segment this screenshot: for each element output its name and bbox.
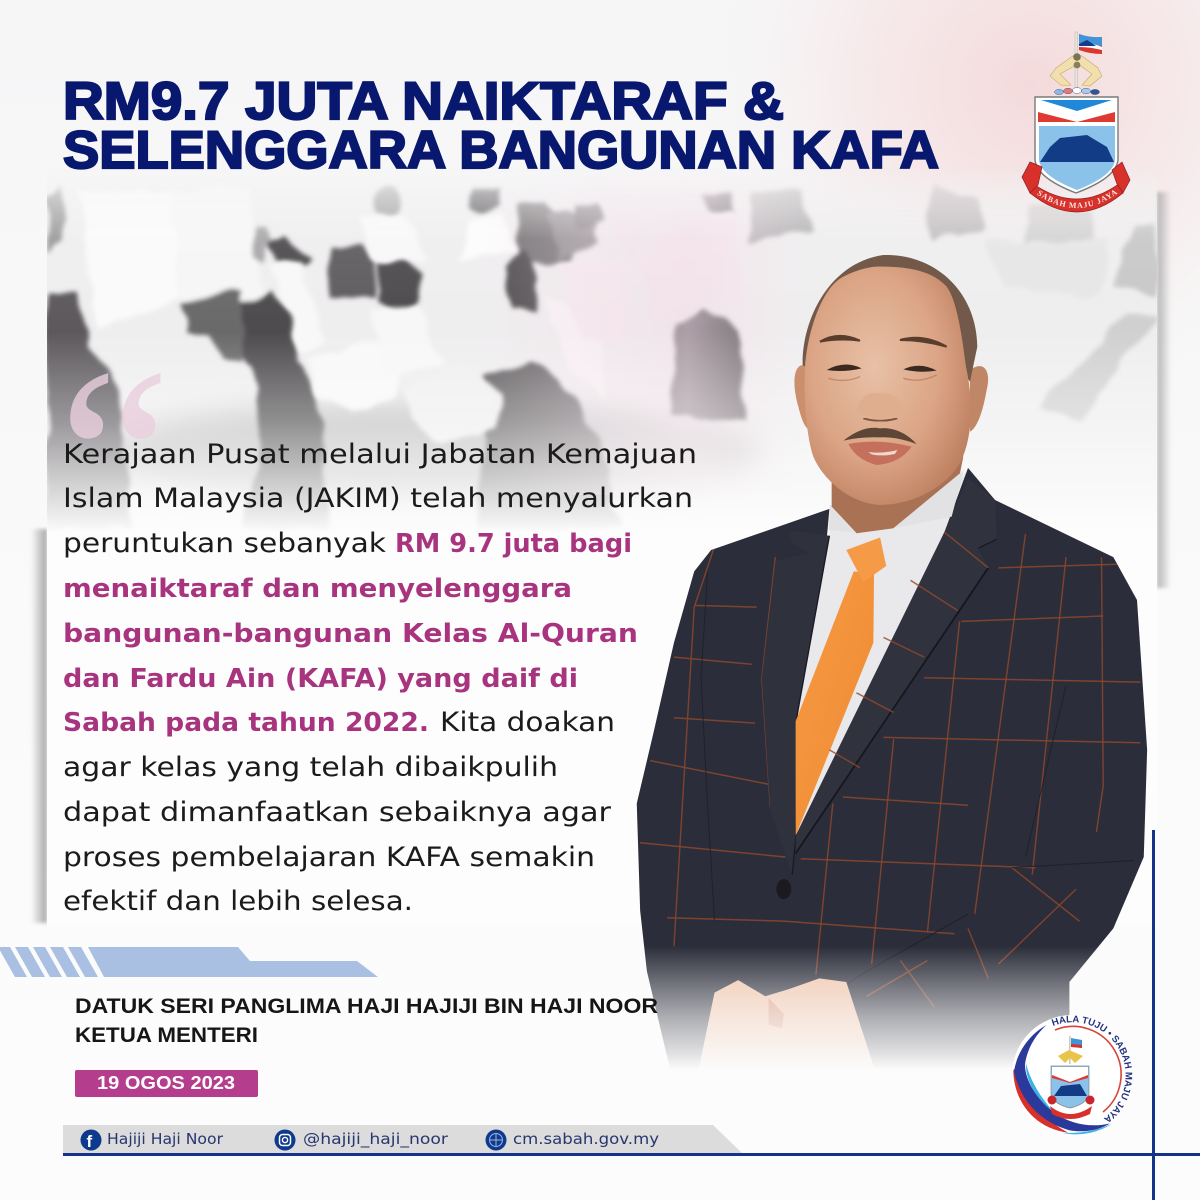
- facebook handle: Hajiji Haji Noor: [107, 1130, 224, 1148]
- crest wreath beads: [1054, 88, 1100, 95]
- panel: fading quote background: [47, 165, 1157, 925]
- mouth: [848, 442, 912, 465]
- date badge: 19 OGOS 2023: [97, 1072, 235, 1093]
- social footer bar: [63, 1125, 743, 1154]
- jacket plaid: [640, 534, 1140, 1007]
- black school bag: [330, 246, 375, 298]
- top left dark corner: [47, 190, 62, 252]
- icon: facebook: f: [86, 1132, 92, 1151]
- crest flag: [1075, 32, 1102, 90]
- crest shield: [1035, 97, 1118, 193]
- moustache: [843, 428, 917, 444]
- pink tint over the right children: [504, 192, 769, 495]
- icon: Sabah state crest: [1022, 32, 1130, 212]
- eyes: [827, 365, 937, 372]
- decorative banner stripes: [0, 947, 378, 977]
- quote text: peruntukan sebanyak: [63, 528, 387, 559]
- icon: facebook: [80, 1130, 102, 1151]
- hair: [803, 255, 977, 382]
- left lapel: [762, 535, 830, 807]
- navy frame lines: [63, 830, 1200, 1200]
- capped boy: [468, 186, 500, 212]
- suit jacket: [637, 468, 1147, 1107]
- pink tinted right child: [702, 192, 734, 216]
- website: cm.sabah.gov.my: [513, 1130, 659, 1148]
- capped child and hijab: [268, 236, 310, 266]
- quote text: RM 9.7 juta bagi: [395, 529, 632, 559]
- kneeling child head: [505, 250, 540, 312]
- right side desks and floor band: [990, 245, 1106, 292]
- quote text: efektif dan lebih selesa.: [63, 886, 413, 917]
- head: [794, 255, 988, 533]
- badge circular text: HALA TUJU • SABAH MAJU JAYA: [1052, 1016, 1132, 1122]
- centre dark child: [232, 293, 330, 530]
- face: [805, 267, 971, 505]
- badge red ring: [1055, 1026, 1121, 1112]
- crest ribbon: SABAH MAJU JAYA: [1037, 190, 1118, 208]
- icon: globe: [486, 1130, 506, 1150]
- dark back-pack bottom: [480, 360, 618, 530]
- middle child head: [378, 257, 420, 315]
- neck: [832, 457, 963, 533]
- white desk boxes and shirts: [310, 345, 396, 412]
- crest ribbon: [1022, 162, 1130, 212]
- ears: [794, 365, 810, 430]
- icon: instagram: [274, 1130, 296, 1150]
- quote text: Islam Malaysia (JAKIM) telah menyalurkan: [63, 483, 693, 514]
- nose: [857, 393, 904, 418]
- date badge: [75, 1070, 258, 1097]
- boy top middle: [375, 186, 401, 218]
- portrait of the Chief Minister: [637, 468, 1147, 1107]
- quote text: Sabah pada tahun 2022.: [63, 708, 429, 738]
- grey wash low in the photo: [100, 405, 760, 505]
- shirt: [796, 468, 968, 839]
- panel shadow edges: [31, 192, 1171, 923]
- badge crest: [1048, 1036, 1094, 1119]
- title: [63, 72, 939, 180]
- quote text: dan Fardu Ain (KAFA) yang daif di: [63, 664, 578, 694]
- quote mark: “: [58, 317, 171, 599]
- quote text: bangunan-bangunan Kelas Al-Quran: [63, 619, 638, 649]
- quote text: Kita doakan: [440, 707, 615, 738]
- clasped hands: [700, 978, 873, 1064]
- speaker name and role: DATUK SERI PANGLIMA HAJI HAJIJI BIN HAJI NOOR: [75, 994, 658, 1018]
- classroom photo: [47, 184, 1157, 526]
- title: RM9.7 JUTA NAIKTARAF &: [63, 72, 784, 131]
- left seated child: [47, 294, 130, 530]
- right lapel: [796, 479, 997, 853]
- lapel plaid: [829, 532, 988, 768]
- quote text: menaiktaraf dan menyelenggara: [63, 574, 572, 604]
- jacket button: [776, 879, 791, 899]
- speaker name and role: KETUA MENTERI: [75, 1023, 258, 1047]
- quote text: Kerajaan Pusat melalui Jabatan Kemajuan: [63, 439, 697, 470]
- tie: [796, 537, 886, 836]
- crest arms: [1050, 54, 1102, 86]
- badge: Hala Tuju Sabah Maju Jaya: [1013, 1015, 1132, 1134]
- dark bag: [180, 288, 245, 360]
- quote text: agar kelas yang telah dibaikpulih: [63, 752, 558, 783]
- speaker name and role: [75, 994, 658, 1047]
- title: SELENGGARA BANGUNAN KAFA: [63, 121, 939, 180]
- eyebrows: [820, 336, 947, 347]
- quote text: [63, 439, 697, 917]
- instagram handle: @hajiji_haji_noor: [303, 1130, 449, 1149]
- badge crescents: [1013, 1025, 1112, 1134]
- shirt collar: [828, 470, 964, 533]
- arm creases: [701, 571, 1134, 989]
- quote text: proses pembelajaran KAFA semakin: [63, 842, 595, 873]
- dark corner seated: [518, 200, 576, 262]
- quote text: dapat dimanfaatkan sebaiknya agar: [63, 797, 611, 828]
